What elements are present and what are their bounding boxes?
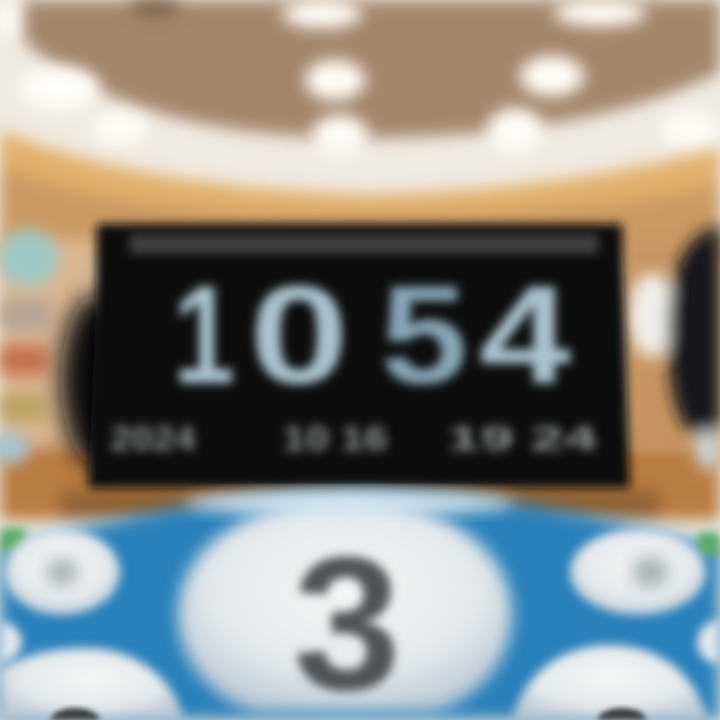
board: [61, 224, 630, 488]
board footer labels: 10 16: [282, 420, 388, 458]
big number: 5: [380, 256, 468, 413]
board footer labels: 19 24: [447, 420, 597, 458]
wooden counter: [0, 445, 720, 520]
board footer labels: 2024: [110, 420, 196, 458]
board footer labels: [110, 420, 597, 458]
big number: [173, 256, 571, 413]
right figure: [628, 225, 720, 470]
board panel: [88, 224, 630, 488]
blue backdrop: [0, 490, 720, 720]
green corners: [0, 528, 720, 556]
left colourful displays: [0, 230, 58, 464]
big number: 0: [249, 256, 349, 413]
left lower ball: [0, 648, 184, 720]
left upper ball: [4, 529, 120, 615]
ceiling panel: [0, 0, 720, 180]
big number: 1: [173, 256, 235, 413]
lottery ball field: [0, 490, 720, 720]
golden wood rim behind board: [0, 130, 720, 260]
ceiling lights: [0, 0, 718, 155]
right upper ball: [570, 529, 706, 615]
side wall behind board: [0, 240, 720, 450]
big number: 4: [479, 256, 571, 413]
board shadow: [61, 295, 129, 465]
right lower ball: [512, 645, 708, 720]
board heading: [130, 234, 598, 254]
edge balls: [0, 620, 720, 664]
centre ball number 3: [178, 491, 515, 720]
